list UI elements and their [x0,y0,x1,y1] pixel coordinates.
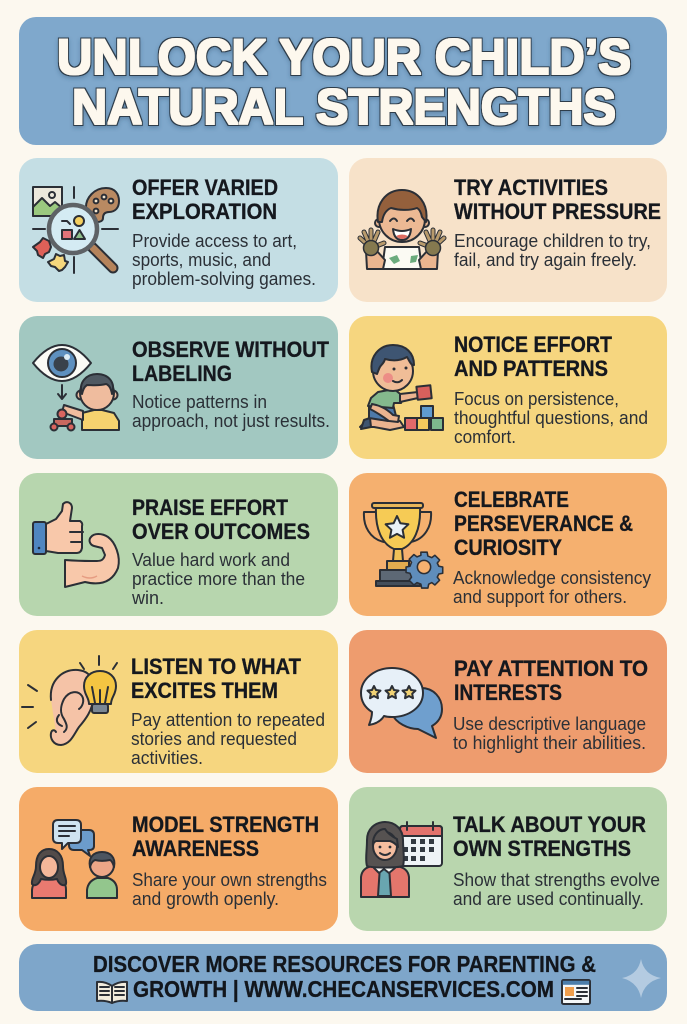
body text: stories and requested [131,729,297,749]
title: NATURAL STRENGTHS [72,79,616,135]
icon: web page [562,980,590,1004]
heading [454,656,648,705]
heading: CELEBRATE [454,487,569,512]
icon: ear with light bulb [22,656,117,745]
body text [131,550,305,608]
heading: NOTICE EFFORT [454,332,612,357]
body text: Show that strengths evolve [453,870,660,890]
panel: talk about your own strengths [349,787,667,931]
heading: PAY ATTENTION TO [454,656,648,681]
heading: OWN STRENGTHS [453,836,631,861]
heading [132,337,329,386]
heading: PRAISE EFFORT [132,495,288,520]
heading: PERSEVERANCE & [454,511,633,536]
icon: smiling child with messy hands [360,190,444,269]
body text [453,568,651,607]
footer text: DISCOVER MORE RESOURCES FOR PARENTING & [93,951,596,977]
body text: win. [131,588,164,608]
body text: Focus on persistence, [454,389,619,409]
body text: to highlight their abilities. [453,733,646,753]
body text: Notice patterns in [132,392,267,412]
heading [132,495,310,544]
heading: WITHOUT PRESSURE [454,199,661,224]
body text [132,870,327,909]
body text: problem-solving games. [132,269,316,289]
body text: Share your own strengths [132,870,327,890]
body text: practice more than the [132,569,305,589]
body text [453,714,646,753]
body text: Use descriptive language [453,714,646,734]
body text: Encourage children to try, [454,231,651,251]
icon: woman with calendar [361,822,442,897]
heading: LISTEN TO WHAT [131,654,302,679]
body text [132,392,330,431]
body text: and support for others. [453,587,627,607]
heading [131,654,302,703]
heading: OBSERVE WITHOUT [132,337,329,362]
panel: notice effort and patterns [349,316,667,459]
body text: Acknowledge consistency [453,568,651,588]
heading: TRY ACTIVITIES [454,175,608,200]
panel: celebrate perseverance and curiosity [349,473,667,616]
body text: activities. [131,748,203,768]
body text: and growth openly. [132,889,279,909]
icon: magnifying glass with art and puzzle pieces [33,187,119,273]
icon: trophy with gear [364,503,443,588]
heading [454,487,633,560]
icon: thumbs up and flexed arm [33,502,119,587]
body text: Provide access to art, [132,231,297,251]
title [57,29,631,135]
heading: CURIOSITY [454,535,562,560]
body text [131,710,325,768]
heading: MODEL STRENGTH [132,812,319,837]
panel: listen to what excites them [19,630,338,773]
panel: offer varied exploration [19,158,338,302]
body text: Pay attention to repeated [131,710,325,730]
body text [454,231,651,270]
title: UNLOCK YOUR CHILD’S [57,29,631,85]
panel: observe without labeling [19,316,338,459]
heading: OFFER VARIED [132,175,278,200]
heading: EXPLORATION [132,199,277,224]
heading [454,175,661,224]
body text: thoughtful questions, and [454,408,648,428]
heading: EXCITES THEM [131,678,278,703]
body text: and are used continually. [453,889,644,909]
footer banner [19,944,667,1011]
body text [453,870,660,909]
heading: AWARENESS [132,836,259,861]
heading [454,332,612,381]
footer text: GROWTH | WWW.CHECANSERVICES.COM [133,976,554,1002]
body text: Value hard work and [132,550,290,570]
panel: praise effort over outcomes [19,473,338,616]
heading [453,812,646,861]
icon: two people talking [32,820,117,898]
body text: sports, music, and [132,250,271,270]
body text: fail, and try again freely. [454,250,637,270]
panel: pay attention to interests [349,630,667,773]
icon: eye above child playing with toy [33,345,119,430]
heading [132,812,319,861]
icon: child stacking blocks [360,345,443,430]
heading: OVER OUTCOMES [132,519,310,544]
title banner [19,17,667,145]
icon: speech bubbles with stars [361,668,442,738]
heading [132,175,278,224]
body text: approach, not just results. [132,411,330,431]
icon: open book [97,982,127,1003]
heading: INTERESTS [454,680,562,705]
body text [132,231,316,289]
panel: model strength awareness [19,787,338,931]
panel: try activities without pressure [349,158,667,302]
heading: AND PATTERNS [454,356,608,381]
icon: sparkle [622,959,661,998]
body text [454,389,648,447]
heading: LABELING [132,361,232,386]
heading: TALK ABOUT YOUR [453,812,646,837]
footer text [93,951,596,1002]
body text: comfort. [454,427,516,447]
